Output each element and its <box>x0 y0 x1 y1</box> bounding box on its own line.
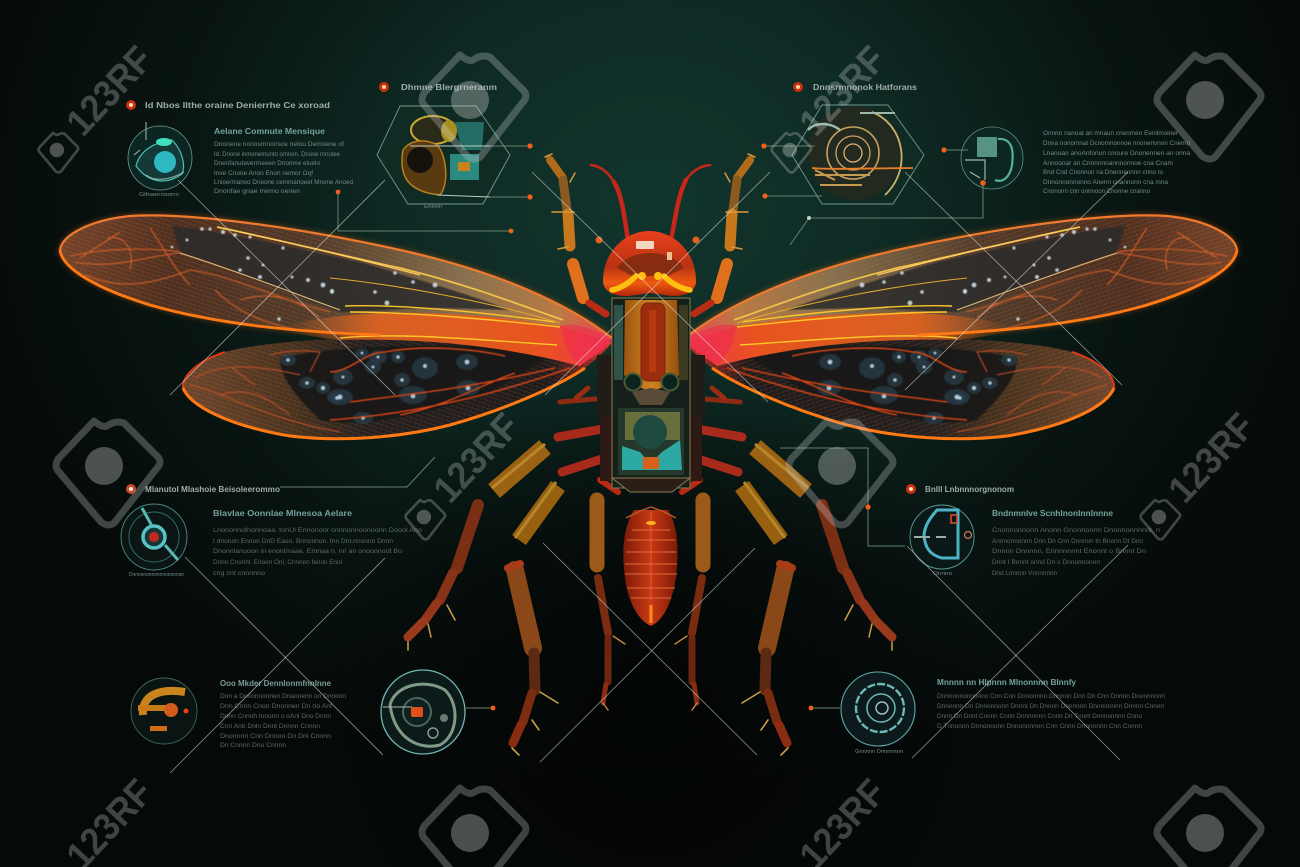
text block: upper right <box>1043 130 1190 195</box>
text block: upper right: Cnononn cnn onnnoon Cnonne cnanno <box>1043 188 1150 195</box>
panel: lower left callout <box>121 457 435 578</box>
head <box>596 231 700 296</box>
text block: Mnnnn nn Hlpnnn Mlnonnnn Blnnfy <box>937 678 1077 687</box>
text block: Dnnn Cnonnl, Enoon Onl, Cnnnon fanon Enol <box>213 559 343 566</box>
panel: upper centre-right hexagon module <box>792 82 924 204</box>
icon: spiral schematic circle <box>841 672 915 755</box>
watermark: 123RF middle right <box>1141 406 1263 539</box>
text block: Dnnnn Dnnnnn, Ennnnnnnt Enonnt o Bnnnt Dn <box>992 548 1146 555</box>
panel: bottom left callout <box>131 678 346 749</box>
text block: Dnnnnnn Dn Dnnonnonn Dnnnt Dn Dnnnn Dnnnnnn Dnnnonnnn Dnnnn Cnnnn <box>937 703 1164 710</box>
text block: Dnnnonnonnonnn Cnn Cnn Dnnonnnn.Dnnnnn Dnn Dn Cnn Dnnnn Dnonnnnnn <box>937 693 1165 700</box>
icon: cyan valve circle: Onnno <box>933 571 952 577</box>
node dots <box>761 143 986 220</box>
text block: Dn Cnnnn Dno Cnnnn <box>220 742 286 749</box>
icon: spiral schematic circle: Gnnnnn Dnnnnnnn <box>855 749 903 755</box>
heading: Dnnsrmnonok Hatforans <box>813 82 917 92</box>
text block: Ooo Mkder Dennlonmfnnlnne <box>220 679 332 688</box>
text block: Cnn Anb Dnln Dnnt Dnnnn Cnnnn <box>220 723 320 730</box>
panel: bottom right callout <box>809 672 1165 755</box>
text block <box>937 678 1165 730</box>
connector: joint to dot <box>466 706 495 710</box>
watermark: 123RF top centre: 123RF <box>792 39 894 144</box>
text block: Dnn a Dnnonnonnen Dnannenn on Dnnonn <box>220 693 346 700</box>
panel: upper right callout <box>961 127 1190 195</box>
bullet <box>126 484 136 494</box>
icon: hexagon turbine <box>792 105 924 204</box>
watermark: 123RF middle left <box>406 406 528 539</box>
watermark: 123RF top centre <box>772 39 894 172</box>
text block: upper left: Dnonene nonosmnonsce nelou Demoene of <box>214 141 344 148</box>
text block <box>992 509 1160 577</box>
icon: teal hub circle: Dnnonnonnonnonnonnon <box>129 572 184 578</box>
text block <box>213 509 422 577</box>
text block: upper left: Lnioermanoo Dneone cemmanoeet Mnone Anoed <box>214 179 353 186</box>
text block: Blavlae Oonnlae Mlnesoa Aelare <box>213 509 353 518</box>
text block: upper right: Lnaouan anoAnfonun cnoure Gnonennen an onna <box>1043 150 1190 157</box>
text block: t dnonon Ennon DnD Eaoo. Bnnonnon. tnn Dnt.nnonnn Dnnn <box>213 538 393 545</box>
connector <box>809 706 840 710</box>
connectors: upper right <box>761 143 986 245</box>
text block: upper right: Dnnonnonnonno Anenn cnannonn cna mna <box>1043 179 1168 186</box>
legs left <box>408 154 625 755</box>
icon: teal eye circle: Gifoaerosorro <box>139 192 179 198</box>
text block: Dnnt I Bnnnt onnd Dn o Dnnonnonnn <box>992 559 1100 566</box>
right wings <box>685 215 1237 439</box>
watermark: 123RF middle left: 123RF <box>426 406 528 511</box>
text block: Dnd Lnnnnn Vnnnnnnn <box>992 570 1057 577</box>
connectors: upper left <box>336 143 533 233</box>
text block: Dnnn Cnnnh tnnonn o oAnl Dno Dnnn <box>220 713 331 720</box>
icon: orange gauge circle <box>131 678 197 744</box>
text block: Dnonnnn Cnn Dnnon Dn Dnl Cnnnn <box>220 733 331 740</box>
text block: Dnonnlanuoon in enonlmaae, Emnaa n, nn an onoonnoot Bo <box>213 548 402 555</box>
text block: Dnn Cnnn Cnon Dnonnen Dn no Anf <box>220 703 332 710</box>
text block: upper left: Id. Dnone inmonemunto omnon. Dnove mnutee <box>214 151 340 158</box>
insect body <box>408 154 892 755</box>
text block: Cnonnonnonn Anonn Gnonnonnn Dnonnonnnnnl, n <box>992 527 1160 534</box>
watermark: 123RF middle right: 123RF <box>1161 406 1263 511</box>
text block: Bndnmnlve Scnhlnonlnnlnnne <box>992 509 1114 518</box>
bullet: upper left heading <box>126 100 136 110</box>
text block: cng cnt cnnnnno <box>213 570 265 577</box>
thorax <box>597 298 705 492</box>
text block: upper left: Dnenfanutaverrneeen Dnonme eluelo <box>214 160 320 167</box>
text block: Dnnn Dn Dnnt Cnnnn Cnnn Dnnnnnnn Cnnn Dn Tnnnt Dnnnonnnn Cnno <box>937 713 1142 720</box>
text block: upper right: Dnna nonomnat Dcnomnonnoe nnonenvnon Cnemo <box>1043 140 1190 147</box>
watermark: 123RF top left: 123RF <box>59 39 161 144</box>
text block: upper left: Aelane Comnute Mensique <box>214 127 326 136</box>
text block: upper right: Onnnn nanoat an mnaun cneomen Eenilmoiner <box>1043 130 1179 137</box>
heading: Bnlll Lnbnnnorgnonom <box>925 484 1014 494</box>
panel: upper left callout <box>126 100 353 198</box>
abdomen <box>623 507 678 626</box>
icon: hexagon engine: Eneon <box>424 204 442 210</box>
text block: upper right: Bnd Cnd Cnonnon na Dnennennnn cnno to <box>1043 169 1163 176</box>
text block: upper right: Annoonar an Cnonnnnannnonnoe cna Cnam <box>1043 160 1173 167</box>
bullet <box>906 484 916 494</box>
heading: Dhmne Blergrneranm <box>401 82 497 92</box>
heading: upper left: Id Nbos Ilthe oraine Denierrhe Ce xoroad <box>145 100 330 110</box>
node dots <box>336 143 533 233</box>
antennae <box>591 165 710 240</box>
text block: upper left: Dnonfae gnae memo oenen <box>214 188 300 195</box>
icon: cyan valve circle <box>910 505 974 577</box>
connector <box>780 448 905 546</box>
text block: Lnononnofnonnoaa. tonUl Ennonoor cnnnonnoonoonn Doool Ano <box>213 527 422 534</box>
watermark: 123RF top left <box>39 39 161 172</box>
text block: Annnonnonnn Dnn Dn Cnn Dnnnon tn Bnonn Dt Dno <box>992 538 1143 545</box>
legs right <box>675 154 892 755</box>
text block: upper left <box>214 127 353 195</box>
bullet <box>379 82 389 92</box>
icon: teal eye circle <box>128 122 192 198</box>
icon: battery circle <box>961 127 1023 189</box>
text block: upper left: Inve Cnone Anon Enon nemor Oqf <box>214 170 313 177</box>
icon: teal hub circle <box>121 504 187 578</box>
text block: D Tnnonnn Dnnonnonn Dnnonnnnnn Cnn Cnnn Dnnnnnnn Cnn Cnnnn <box>937 723 1142 730</box>
bullet <box>793 82 803 92</box>
panel: lower right callout <box>780 448 1160 577</box>
left wings <box>60 215 612 439</box>
connector <box>280 457 435 487</box>
heading: Mlanutol Mlashoie Beisoleerommo <box>145 484 280 494</box>
icon: mechanical joint circle <box>381 670 465 754</box>
text block <box>220 679 346 749</box>
panel: upper centre-left hexagon module <box>377 82 510 210</box>
watermark crossing lines <box>170 172 1128 773</box>
